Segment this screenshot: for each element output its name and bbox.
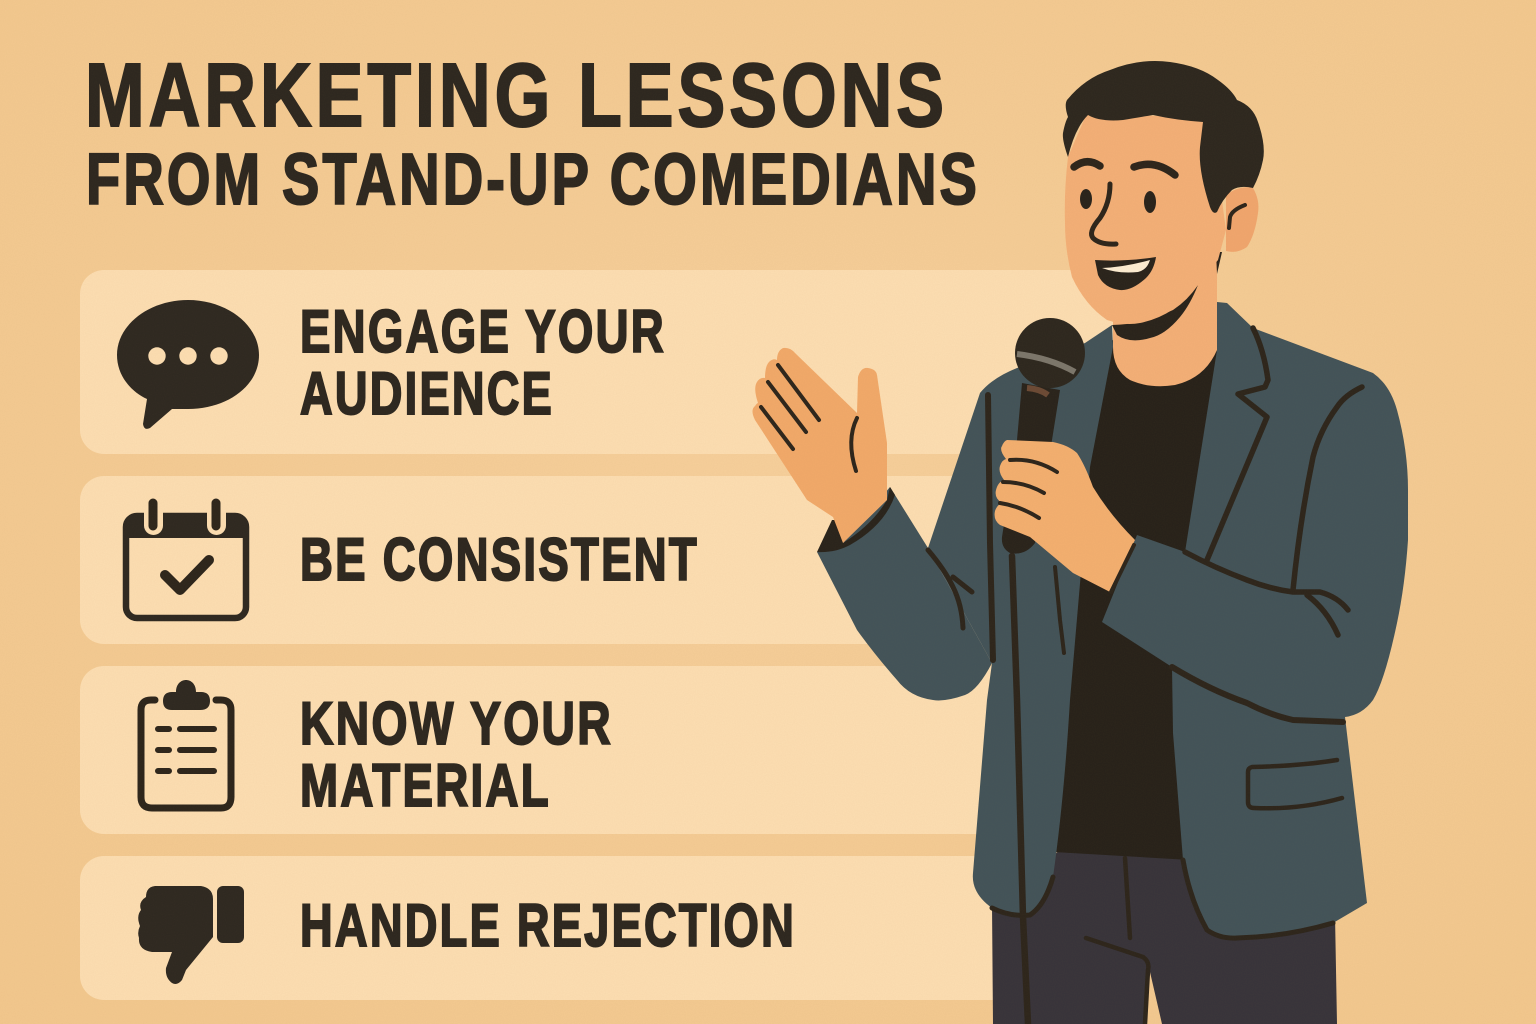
icon: calendar with check	[126, 497, 246, 618]
panel: handle rejection	[80, 856, 1130, 1000]
raised open hand	[752, 348, 887, 543]
label: engage your audience: AUDIENCE	[300, 360, 554, 427]
ear	[1226, 187, 1258, 252]
black t-shirt	[1054, 340, 1224, 860]
microphone	[1002, 318, 1085, 1024]
label: handle rejection: HANDLE REJECTION	[300, 892, 796, 959]
nose	[1092, 184, 1116, 244]
title line 2: FROM STAND-UP COMEDIANS	[86, 140, 980, 220]
title line 1: MARKETING LESSONS	[85, 46, 948, 146]
neck	[1113, 240, 1217, 386]
label: engage your audience: ENGAGE YOUR	[300, 298, 666, 365]
chin shadow	[1112, 285, 1198, 340]
face	[1063, 61, 1264, 324]
jacket seams and edges	[928, 328, 1362, 938]
label: know your material: KNOW YOUR	[300, 690, 613, 757]
title	[85, 46, 980, 220]
panel: engage your audience	[80, 270, 1130, 454]
eyebrows	[1074, 162, 1175, 175]
mouth	[1095, 257, 1156, 290]
hair	[1063, 61, 1264, 213]
label: engage your audience	[300, 298, 666, 427]
eyes	[1080, 189, 1092, 209]
jacket sleeve raised	[817, 487, 992, 700]
icon: thumbs down	[138, 886, 244, 984]
jacket left front	[928, 325, 1113, 917]
label: know your material	[300, 690, 613, 819]
jacket right front	[1102, 302, 1408, 938]
hand holding microphone	[995, 440, 1135, 592]
panel: be consistent	[80, 476, 1130, 644]
comedian figure	[752, 61, 1408, 1024]
icon: speech bubble	[117, 300, 259, 429]
label: be consistent: BE CONSISTENT	[300, 526, 699, 593]
panel: know your material	[80, 666, 1130, 834]
trousers	[992, 850, 1337, 1024]
hair shadow under ear	[1216, 252, 1222, 274]
label: know your material: MATERIAL	[300, 752, 551, 819]
icon: clipboard	[141, 680, 231, 808]
